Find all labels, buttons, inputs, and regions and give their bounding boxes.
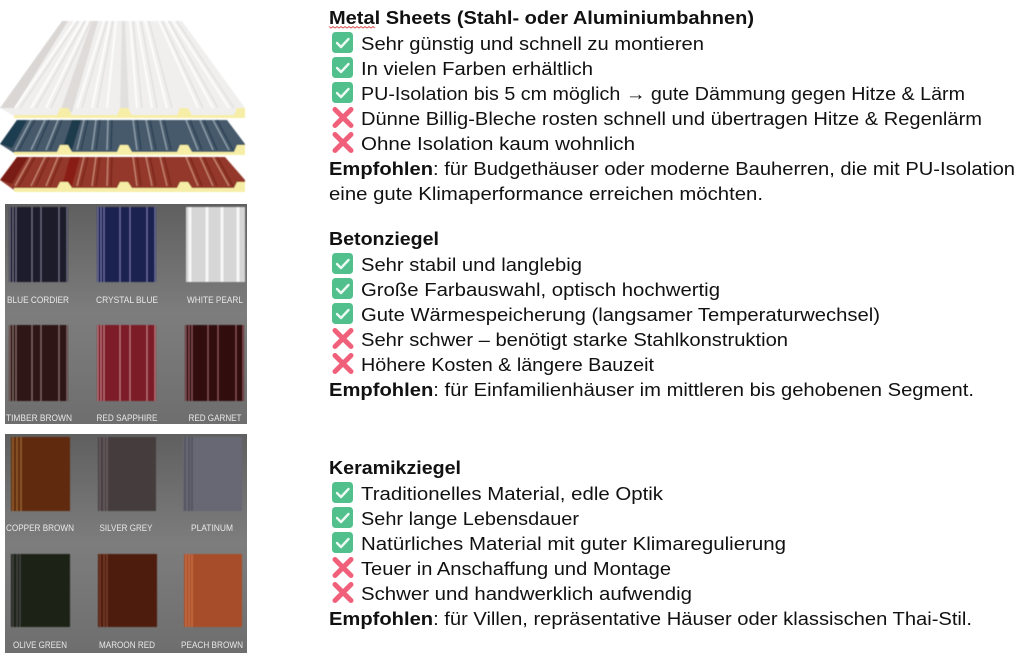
swatch labels: WHITE PEARL bbox=[187, 295, 243, 305]
swatch labels bbox=[6, 295, 243, 423]
icon: check bbox=[332, 253, 353, 274]
text block: keramikziegel bbox=[329, 457, 972, 629]
tile: peach brown bbox=[184, 554, 242, 627]
image: metal roof sheets bbox=[0, 21, 245, 192]
text block: metal sheets: PU-Isolation bis 5 cm möglich → gute Dämmung gegen Hitze & Lärm bbox=[361, 83, 965, 104]
icon: check bbox=[332, 482, 353, 503]
text block: metal sheets: eine gute Klimaperformance erreichen möchten. bbox=[329, 183, 763, 204]
icon: check bbox=[332, 278, 353, 299]
text block: betonziegel: Sehr schwer – benötigt starke Stahlkonstruktion bbox=[361, 329, 788, 350]
tile: silver grey bbox=[98, 437, 156, 511]
text block: betonziegel: Sehr stabil und langlebig bbox=[361, 254, 582, 275]
icon: check bbox=[332, 303, 353, 324]
tile: copper brown bbox=[11, 437, 70, 511]
recommendation: Empfohlen : für Budgethäuser oder moderne Bauherren, die mit PU-Isolation bbox=[329, 158, 1015, 179]
heading: metal sheets: Metal Sheets (Stahl- oder Aluminiumbahnen) bbox=[329, 7, 754, 28]
recommendation: Empfohlen : für Einfamilienhäuser im mittleren bis gehobenen Segment. bbox=[329, 379, 974, 400]
text block: betonziegel: Gute Wärmespeicherung (langsamer Temperaturwechsel) bbox=[361, 304, 880, 325]
text block: betonziegel: Große Farbauswahl, optisch hochwertig bbox=[361, 279, 720, 300]
swatch labels: RED GARNET bbox=[188, 413, 242, 423]
swatch labels: MAROON RED bbox=[99, 640, 155, 650]
icon: check bbox=[332, 57, 353, 78]
image: ceramic tile swatches bbox=[5, 434, 247, 653]
tile: crystal blue bbox=[97, 207, 156, 282]
heading: keramikziegel: Keramikziegel bbox=[329, 457, 461, 478]
blue sheet bbox=[0, 120, 245, 155]
text block: keramikziegel: Schwer und handwerklich aufwendig bbox=[361, 583, 692, 604]
icon: cross bbox=[335, 584, 351, 600]
swatch labels: SILVER GREY bbox=[100, 523, 152, 533]
icon: cross bbox=[335, 330, 351, 346]
swatch labels: TIMBER BROWN bbox=[6, 413, 72, 423]
text block: metal sheets bbox=[329, 7, 1015, 204]
swatch labels: BLUE CORDIER bbox=[7, 295, 69, 305]
icon: check bbox=[332, 82, 353, 103]
tile: platinum bbox=[183, 437, 242, 511]
text block: metal sheets: Sehr günstig und schnell zu montieren bbox=[361, 33, 704, 54]
tile: white pearl bbox=[186, 207, 245, 282]
swatch labels: OLIVE GREEN bbox=[13, 640, 67, 650]
image: concrete tile swatches bbox=[5, 204, 247, 424]
swatch labels bbox=[6, 523, 243, 650]
tile: red garnet bbox=[185, 325, 244, 401]
icon: cross bbox=[335, 110, 351, 126]
swatch labels: PLATINUM bbox=[191, 523, 233, 533]
tile: maroon red bbox=[98, 554, 157, 627]
icon: check bbox=[332, 507, 353, 528]
recommendation: Empfohlen : für Villen, repräsentative Häuser oder klassischen Thai-Stil. bbox=[329, 608, 972, 629]
tile: olive green bbox=[11, 554, 70, 627]
tile: red sapphire bbox=[97, 325, 156, 401]
icon: cross bbox=[335, 356, 351, 372]
heading: betonziegel: Betonziegel bbox=[329, 228, 439, 249]
text block: metal sheets: Dünne Billig-Bleche rosten schnell und übertragen Hitze & Regenlärm bbox=[361, 108, 982, 129]
white sheet bbox=[0, 21, 245, 118]
icon: cross bbox=[335, 134, 351, 150]
swatch labels: RED SAPPHIRE bbox=[96, 413, 158, 423]
tile: timber brown bbox=[9, 325, 68, 401]
text block: keramikziegel: Natürliches Material mit guter Klimaregulierung bbox=[361, 533, 786, 554]
swatch labels: CRYSTAL BLUE bbox=[96, 295, 158, 305]
text block: metal sheets: Ohne Isolation kaum wohnlich bbox=[361, 133, 635, 154]
icon: check bbox=[332, 532, 353, 553]
icon: check bbox=[332, 32, 353, 53]
text block: betonziegel bbox=[329, 228, 974, 400]
text block: keramikziegel: Traditionelles Material, edle Optik bbox=[361, 483, 664, 504]
swatch labels: COPPER BROWN bbox=[6, 523, 74, 533]
swatch labels: PEACH BROWN bbox=[181, 640, 243, 650]
icon: cross bbox=[335, 560, 351, 576]
tile: blue cordier bbox=[9, 207, 68, 282]
red sheet bbox=[0, 157, 245, 192]
text block: metal sheets: In vielen Farben erhältlich bbox=[361, 58, 593, 79]
text block: betonziegel: Höhere Kosten & längere Bauzeit bbox=[361, 354, 655, 375]
text block: keramikziegel: Sehr lange Lebensdauer bbox=[361, 508, 579, 529]
text block: keramikziegel: Teuer in Anschaffung und Montage bbox=[361, 558, 671, 579]
